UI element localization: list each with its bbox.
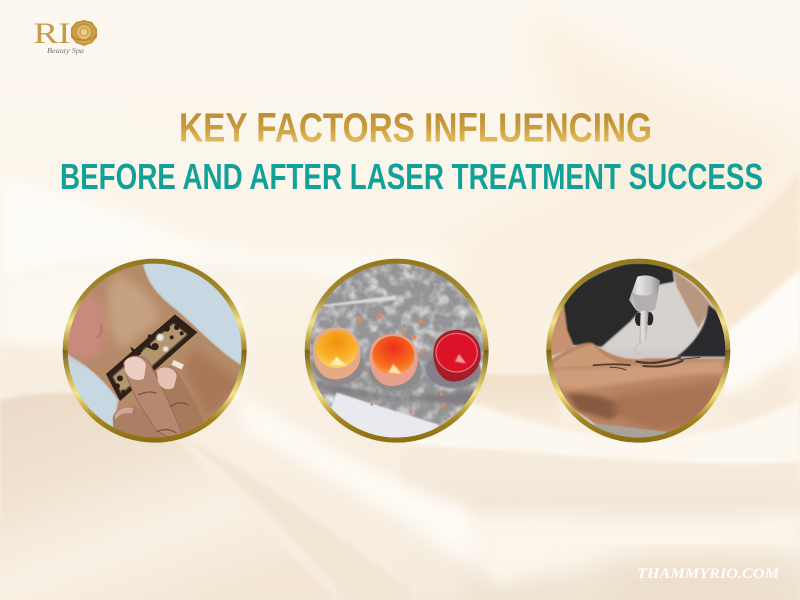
peach fold top right [680,170,800,332]
gold ring [307,261,486,440]
logo tagline: Beauty Spa [47,46,84,55]
black glove [563,263,674,347]
lower right silk [400,448,800,600]
white diagonal band [240,395,470,560]
laser handpiece [629,275,660,353]
icon: gold rose [71,20,97,46]
photo circle: laser removal [547,257,733,447]
website label: THAMMYRIO.COM [637,566,780,582]
pot: red [426,330,481,388]
large lower-left fold [0,393,340,600]
arm [68,264,240,433]
photo circle: ink pots [303,257,490,447]
skin behind [673,272,712,328]
gold ring [65,261,244,440]
arm [550,343,730,433]
fingers [112,406,166,438]
peach fold centre right [470,372,560,430]
title line 1: KEY FACTORS INFLUENCING [179,104,652,150]
pot: orange [368,334,422,391]
gold ring [549,261,728,440]
white band below [400,400,800,483]
tattoo [593,357,700,370]
photo circle: tattoo on wrist [60,257,253,447]
white paper [330,392,440,438]
dark sleeve [677,305,730,357]
logo: RIO Beauty Spa [34,17,97,55]
pot: yellow [312,327,364,385]
logo letters: RI [34,17,70,50]
tattoo band [106,314,197,401]
